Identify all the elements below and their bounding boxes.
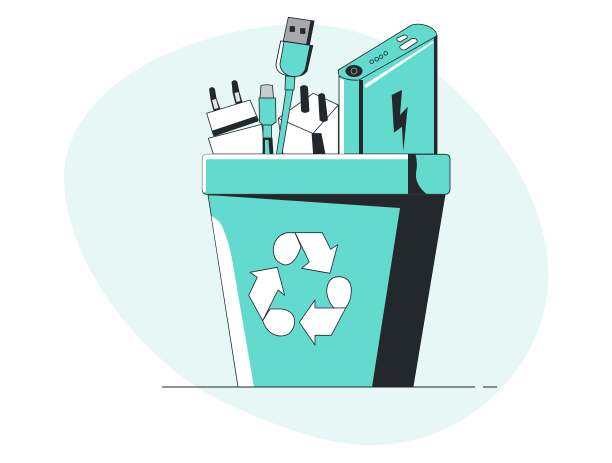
background blob	[64, 24, 548, 445]
icon: USB cable	[276, 17, 314, 154]
bin highlight	[212, 216, 254, 387]
ground line	[162, 386, 497, 388]
lid highlight	[202, 154, 408, 193]
recycling symbol	[249, 233, 351, 345]
power bank top face	[338, 24, 437, 80]
icon: lightning bolt	[392, 90, 408, 152]
recycling arrow: right	[299, 277, 351, 345]
bin lid	[202, 154, 450, 194]
lid rim	[202, 154, 450, 194]
USB ports	[397, 35, 417, 50]
recycling bin body	[208, 195, 445, 387]
icon: EU plug charger	[207, 80, 266, 154]
recycling arrow: top	[273, 233, 338, 273]
lid fold shadow	[408, 154, 427, 194]
icon: power bank	[338, 24, 437, 154]
bin shadow	[208, 195, 445, 387]
power bank front face	[339, 35, 437, 154]
charge indicator dots	[370, 52, 388, 64]
recycling arrow: left	[249, 267, 295, 336]
icon: US plug charger	[278, 86, 338, 154]
icon: power button	[346, 65, 362, 77]
icon: lightning cable	[259, 85, 276, 154]
